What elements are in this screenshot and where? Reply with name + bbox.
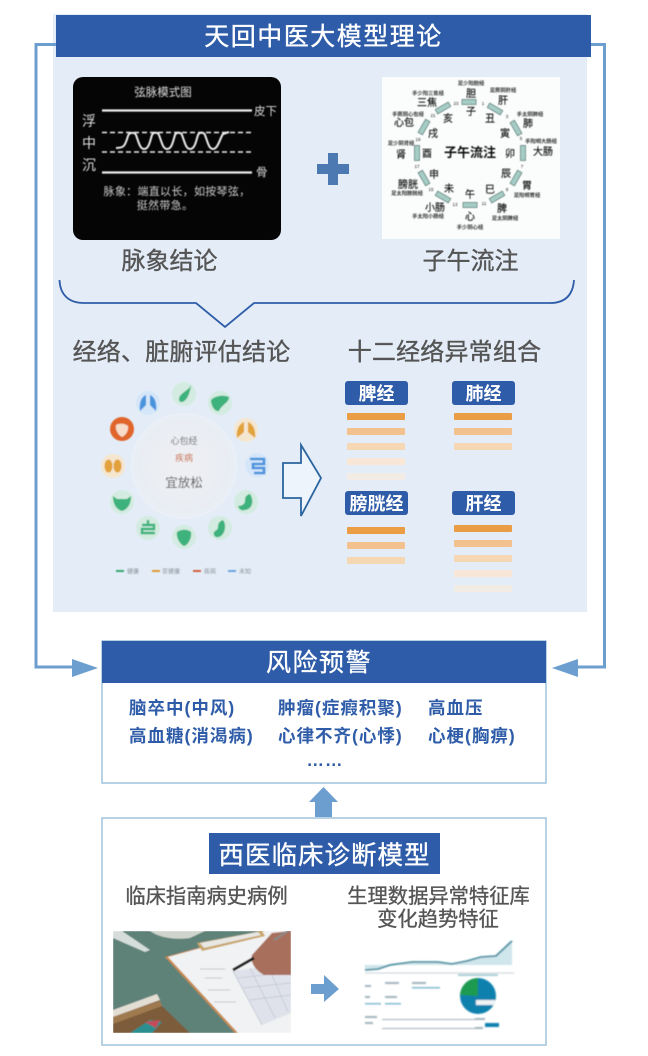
panel: meridian clock diagram: 手阳明大肠经 bbox=[525, 137, 558, 145]
panel: meridian clock diagram: 3 bbox=[506, 114, 509, 119]
panel: meridian clock diagram: 13 bbox=[452, 202, 458, 207]
panel: meridian clock diagram: 午 bbox=[465, 188, 475, 201]
panel: bladder meridian bbox=[345, 491, 408, 564]
legend: 亚健康 bbox=[162, 568, 180, 576]
arrow: photo to data chart bbox=[311, 975, 339, 1002]
panel: meridian clock diagram: 子午流注 bbox=[444, 145, 496, 160]
panel: liver meridian bbox=[452, 491, 515, 592]
panel: meridian clock diagram: 胃 bbox=[522, 180, 532, 192]
panel: pulse pattern diagram: 浮 bbox=[82, 113, 96, 129]
heading: theory title bar: 天回中医大模型理论 bbox=[204, 23, 443, 51]
panel: spleen meridian: 脾经 bbox=[358, 384, 394, 404]
panel: meridian clock diagram: 足厥阴肝经 bbox=[490, 86, 517, 94]
center summary circle: 心包经 bbox=[170, 435, 198, 446]
panel: meridian clock diagram: 肝 bbox=[498, 95, 508, 107]
arrow: up to risk warning bbox=[309, 787, 338, 817]
panel: meridian clock diagram: 心包 bbox=[394, 116, 414, 129]
icon: heart green bbox=[172, 525, 196, 549]
heading: theory title bar bbox=[56, 15, 591, 57]
panel: meridian clock diagram: 11 bbox=[482, 201, 487, 206]
heading: western model title: 西医临床诊断模型 bbox=[218, 842, 431, 870]
icon: spleen bbox=[208, 516, 232, 540]
panel: meridian clock diagram: 17 bbox=[414, 164, 420, 169]
panel: pulse pattern diagram: 脉象：端直以长，如按琴弦， bbox=[104, 184, 250, 198]
heading: twelve meridian combination: 十二经络异常组合 bbox=[348, 339, 541, 366]
panel: meridian clock diagram: 脾 bbox=[497, 202, 507, 215]
panel: meridian clock diagram: 大肠 bbox=[533, 145, 553, 158]
icon: lungs orange bbox=[234, 418, 258, 442]
center summary circle bbox=[132, 414, 236, 518]
panel: meridian clock diagram: 9 bbox=[506, 187, 509, 192]
legend: 疾病 bbox=[204, 568, 216, 576]
panel: meridian clock diagram: 三焦 bbox=[417, 96, 437, 109]
panel: pulse pattern diagram: 沉 bbox=[82, 157, 96, 173]
chart: analytics dashboard bbox=[365, 941, 514, 1029]
legend bbox=[116, 568, 251, 576]
icon: gallbladder bbox=[172, 382, 196, 406]
icon: heart red bbox=[110, 417, 134, 441]
heading: pulse conclusion: 脉象结论 bbox=[122, 248, 218, 275]
center summary circle: 疾病 bbox=[175, 452, 193, 463]
panel: theory background bbox=[53, 14, 587, 612]
panel: meridian clock diagram: 5 bbox=[520, 136, 523, 141]
text: risk list: 肿瘤(症瘕积聚) bbox=[278, 698, 403, 718]
panel: meridian clock diagram: 1 bbox=[482, 101, 485, 106]
chart: ring segments bbox=[414, 100, 526, 208]
panel: meridian clock diagram: 巳 bbox=[485, 184, 495, 196]
panel: pulse pattern diagram: 中 bbox=[82, 135, 96, 151]
panel: meridian clock diagram: 戌 bbox=[428, 127, 438, 140]
text: risk list bbox=[129, 698, 516, 770]
text: risk list: 高血糖(消渴病) bbox=[129, 726, 254, 746]
panel: meridian clock diagram: 丑 bbox=[485, 114, 495, 125]
center summary circle: 宜放松 bbox=[165, 475, 203, 490]
arrow: hollow arrow to meridian combination bbox=[283, 445, 321, 516]
text: risk list: 心梗(胸痹) bbox=[428, 726, 516, 746]
legend: 健康 bbox=[127, 568, 139, 576]
panel: meridian clock diagram: 手厥阴心包经 bbox=[392, 110, 425, 118]
panel: spleen meridian bbox=[345, 381, 408, 480]
panel: meridian clock diagram: 23 bbox=[453, 101, 459, 106]
text: risk list: 心律不齐(心悸) bbox=[278, 726, 403, 746]
panel: lung meridian bbox=[452, 381, 515, 450]
panel: western clinical model bbox=[102, 818, 546, 1045]
icon: large intestine blue bbox=[245, 453, 269, 477]
panel: pulse pattern diagram: 皮下 bbox=[254, 105, 277, 118]
icon: liver bbox=[208, 391, 232, 415]
heading: meridian flow: 子午流注 bbox=[422, 248, 518, 275]
panel: meridian clock diagram: 足少阴肾经 bbox=[388, 139, 415, 147]
panel: meridian clock diagram: 肺 bbox=[523, 118, 533, 130]
panel: meridian clock diagram: 21 bbox=[430, 113, 436, 118]
panel: meridian clock diagram: 19 bbox=[415, 137, 421, 142]
chart: organ assessment ring bbox=[101, 382, 269, 576]
panel: pulse pattern diagram bbox=[73, 77, 281, 240]
legend: 未知 bbox=[239, 568, 251, 576]
panel: meridian clock diagram: 手少阴心经 bbox=[457, 223, 484, 231]
panel: meridian clock diagram: 肾 bbox=[396, 149, 406, 161]
text: risk list: …… bbox=[306, 750, 344, 770]
panel: meridian clock diagram: 手少阳三焦经 bbox=[412, 89, 445, 97]
heading: risk warning title bbox=[102, 641, 546, 683]
panel: meridian clock diagram: 未 bbox=[444, 183, 454, 195]
icon: bladder bbox=[110, 490, 134, 514]
panel: liver meridian: 肝经 bbox=[466, 494, 502, 514]
panel: meridian clock diagram: 亥 bbox=[443, 112, 453, 125]
icon: plus sign bbox=[317, 153, 349, 185]
panel: meridian clock diagram: 7 bbox=[521, 164, 524, 169]
icon: brace joining the two conclusions bbox=[60, 280, 574, 327]
panel: bladder meridian: 膀胱经 bbox=[350, 494, 404, 514]
panel: meridian clock diagram: 酉 bbox=[422, 149, 432, 160]
icon: kidneys bbox=[101, 454, 125, 478]
panel: meridian clock diagram: 足阳明胃经 bbox=[514, 191, 541, 199]
text: physiological features: 变化趋势特征 bbox=[377, 908, 499, 931]
text: clinical guideline cases: 临床指南病史病例 bbox=[125, 885, 288, 908]
panel: meridian clock diagram: 心 bbox=[465, 211, 475, 223]
panel: meridian clock diagram: 足太阴脾经 bbox=[492, 214, 519, 222]
icon: small intestine bbox=[136, 516, 160, 540]
panel: meridian clock diagram: 辰 bbox=[501, 168, 511, 180]
panel: meridian clock diagram: 手太阳小肠经 bbox=[412, 212, 445, 220]
panel: risk warning bbox=[102, 641, 546, 783]
panel: meridian clock diagram: 申 bbox=[429, 168, 439, 181]
text: physiological features bbox=[347, 885, 530, 931]
panel: meridian clock diagram: 寅 bbox=[500, 127, 510, 140]
panel: meridian clock diagram: 手太阴肺经 bbox=[517, 110, 544, 118]
arrow: right feedback line to risk warning bbox=[552, 44, 604, 677]
panel: meridian clock diagram: 子 bbox=[466, 106, 476, 118]
icon: lungs blue bbox=[136, 391, 160, 415]
heading: risk warning title: 风险预警 bbox=[266, 649, 372, 677]
icon: stomach bbox=[234, 490, 258, 514]
text: physiological features: 生理数据异常特征库 bbox=[347, 885, 530, 908]
arrow: left feedback line to risk warning bbox=[36, 44, 98, 677]
panel: meridian clock diagram: 15 bbox=[428, 187, 434, 192]
panel: pulse pattern diagram: 骨 bbox=[256, 166, 268, 179]
heading: assessment conclusion: 经络、脏腑评估结论 bbox=[73, 339, 290, 366]
panel: meridian clock diagram: 膀胱 bbox=[398, 178, 418, 191]
heading: western model title bbox=[209, 833, 440, 874]
panel: meridian clock diagram: 足少阳胆经 bbox=[458, 79, 485, 87]
panel: meridian clock diagram: 小肠 bbox=[425, 202, 445, 214]
panel: pulse pattern diagram: 挺然带急。 bbox=[137, 198, 193, 212]
panel: meridian clock diagram: 足太阳膀胱经 bbox=[391, 189, 424, 197]
panel: lung meridian: 肺经 bbox=[466, 384, 502, 404]
panel: meridian clock diagram: 卯 bbox=[505, 148, 515, 160]
image: clipboard photo bbox=[113, 929, 291, 1033]
panel: meridian clock diagram: 胆 bbox=[466, 88, 476, 100]
text: risk list: 高血压 bbox=[428, 698, 484, 718]
panel: meridian clock diagram bbox=[382, 77, 560, 239]
panel: pulse pattern diagram: 弦脉模式图 bbox=[134, 85, 192, 99]
text: risk list: 脑卒中(中风) bbox=[129, 698, 235, 718]
pie chart bbox=[460, 978, 496, 1014]
